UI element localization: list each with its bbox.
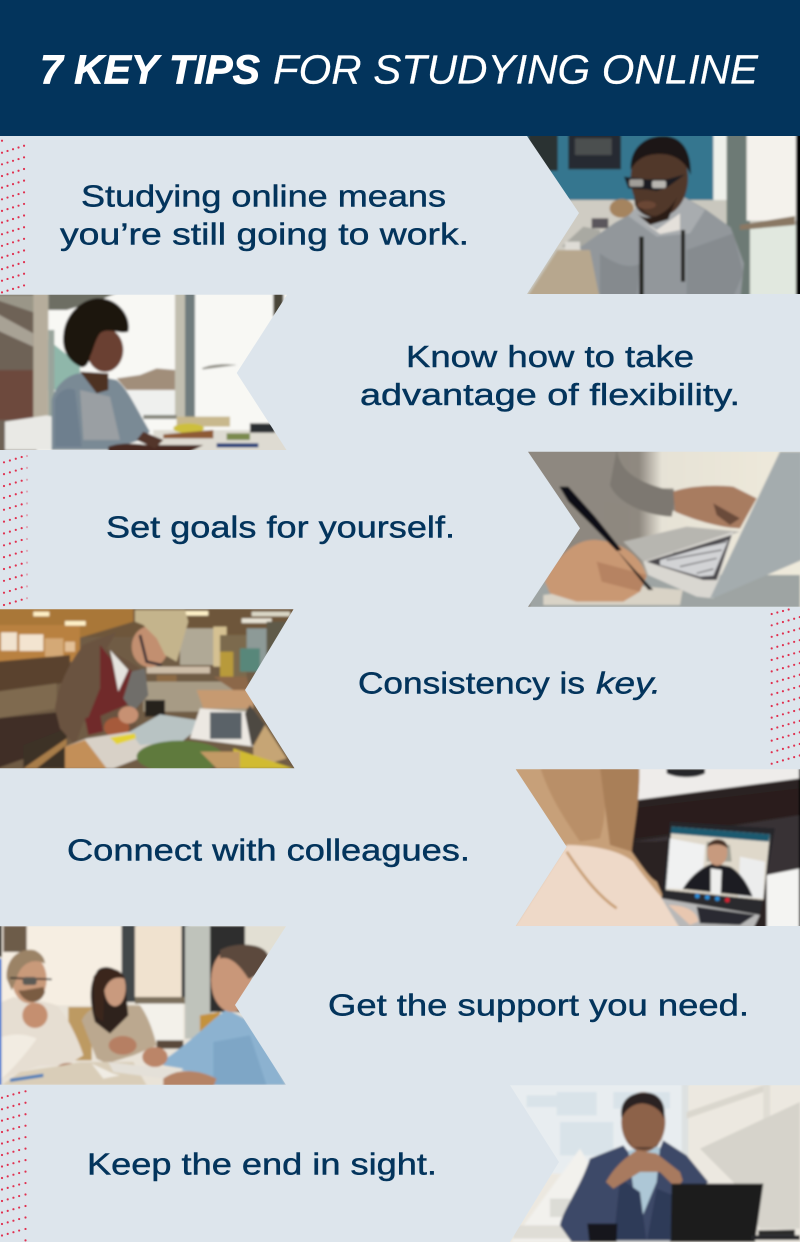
dot pattern xyxy=(4,456,27,605)
title: FOR STUDYING ONLINE xyxy=(273,46,759,92)
tip text: you’re still going to work. xyxy=(60,218,469,252)
panel: tip 4 xyxy=(0,607,800,773)
title xyxy=(40,46,759,92)
tip text xyxy=(358,666,661,700)
tip text xyxy=(60,180,469,252)
tip text: key. xyxy=(596,666,661,700)
panel: tip 3 xyxy=(4,448,800,612)
tip text: Studying online means xyxy=(81,180,446,214)
photo: hands writing notes beside laptop xyxy=(520,448,800,612)
panel: tip 1 xyxy=(2,133,800,297)
dot pattern xyxy=(772,610,800,764)
tip text: Know how to take xyxy=(406,340,694,374)
photo: video call on a laptop xyxy=(513,767,800,930)
title banner xyxy=(0,0,800,136)
photo: student in grey hoodie with laptop xyxy=(520,133,800,297)
photo: woman at sunny desk xyxy=(0,292,297,455)
tip text: Set goals for yourself. xyxy=(106,510,455,544)
tip text: advantage of flexibility. xyxy=(360,378,740,412)
title: 7 KEY TIPS xyxy=(40,46,260,92)
tip text: Consistency is xyxy=(358,666,585,700)
panel: tip 6 xyxy=(0,920,749,1087)
photo: three colleagues at a table xyxy=(0,920,297,1087)
tip text: Keep the end in sight. xyxy=(87,1148,437,1182)
photo: woman working in a workshop xyxy=(0,607,297,773)
panel: tip 2 xyxy=(0,292,740,455)
photo: smiling man with hands clasped at laptop xyxy=(500,1084,800,1242)
dot pattern xyxy=(2,140,24,292)
panel: tip 5 xyxy=(67,767,800,930)
tip text: Connect with colleagues. xyxy=(67,834,470,868)
dot pattern xyxy=(2,1091,26,1242)
tip text xyxy=(360,340,740,412)
panel: tip 7 xyxy=(2,1084,800,1242)
tip text: Get the support you need. xyxy=(328,988,749,1022)
